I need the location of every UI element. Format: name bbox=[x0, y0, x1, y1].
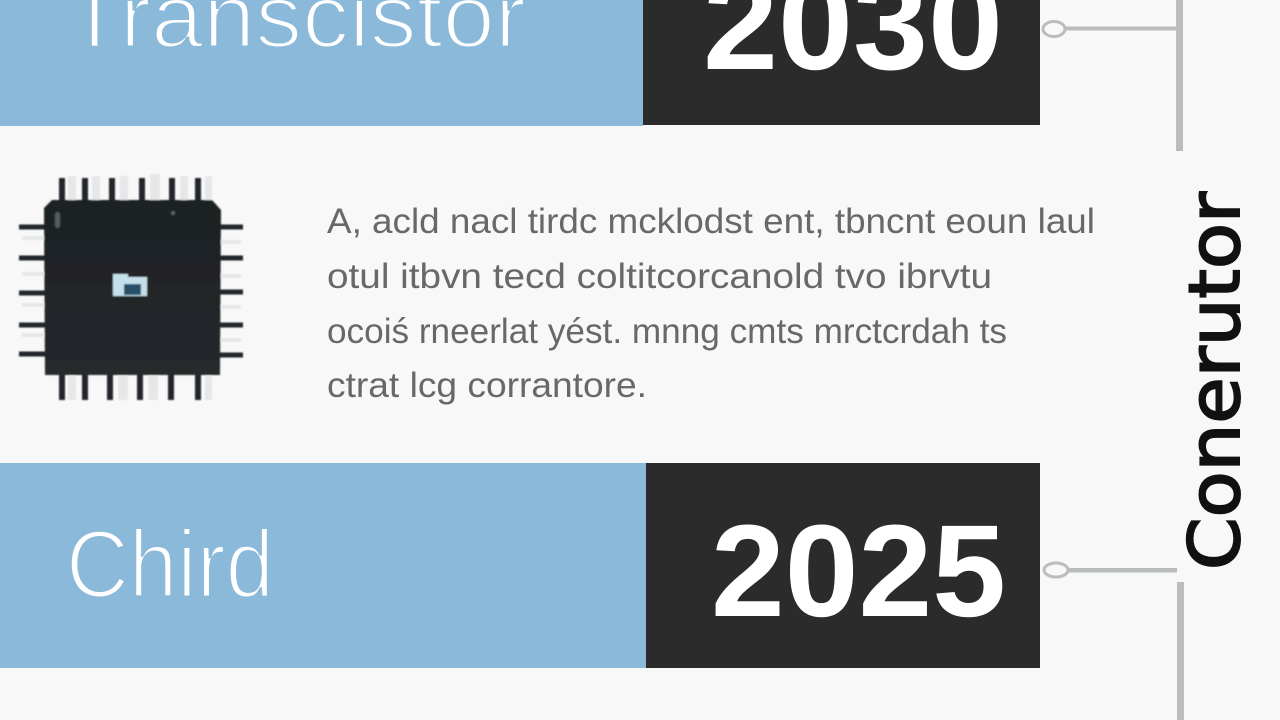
text block: description: A, acld nacl tirdc mcklodst ent, tbncnt eoun laul bbox=[327, 202, 1095, 241]
text block: description: ocoiś rneerlat yést. mnng cmts mrctcrdah ts bbox=[327, 312, 1007, 351]
connector: 2030 to vertical line bbox=[1043, 0, 1183, 151]
connector: 2025 to vertical line bbox=[1044, 563, 1184, 720]
panel: bottom band Chird bbox=[0, 463, 646, 668]
panel: year 2025 bbox=[646, 463, 1040, 668]
text block: description: ctrat lcg corrantore. bbox=[327, 366, 647, 405]
heading: Chird: Chird bbox=[66, 511, 274, 618]
icon: microchip bbox=[19, 174, 243, 400]
panel: year 2030 bbox=[643, 0, 1040, 125]
vertical label: Conerutor: Conerutor bbox=[1174, 192, 1256, 570]
year number 2025: 2025 bbox=[711, 497, 1006, 644]
text block: description: otul itbvn tecd coltitcorcanold tvo ibrvtu bbox=[327, 257, 992, 296]
panel: top band Transcistor bbox=[0, 0, 643, 126]
text block: description bbox=[327, 202, 1095, 405]
